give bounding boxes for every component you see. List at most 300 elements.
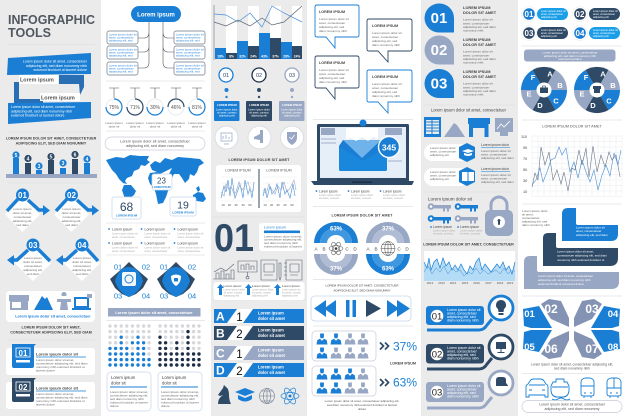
callout 01 (426, 296, 513, 330)
step 02: Lorem ipsum (63, 207, 81, 211)
callout 02: Lorem ipsum dolor sit (447, 346, 480, 350)
arrows caption: sed diam nonummy nibh (554, 366, 590, 370)
step 01: adipiscing elit, (13, 219, 32, 223)
keys and padlock: Lorem ipsum dolor (433, 228, 455, 232)
step 02: consectetuer (63, 215, 80, 219)
step 01 column: sit amet, consect (217, 110, 237, 114)
speech bubble 4: adipiscing elit, sed (372, 90, 398, 94)
step 03: dolor sit amet, (23, 260, 43, 264)
icon pill 1 (424, 143, 514, 162)
bullet list: Lorem ipsum (112, 228, 132, 232)
callout 03: 03 (432, 388, 442, 398)
donut left: 37% (330, 266, 343, 272)
strip C: Lorem ipsum (258, 348, 284, 352)
card 01 (6, 344, 95, 375)
grey caption pill: adipiscing elit, sed diam nonummy nibh (544, 54, 597, 58)
org chart: amet, consectetuer (176, 50, 201, 54)
teardrop 01: DOLOR SIT AMET (463, 10, 497, 15)
column and line chart (214, 5, 302, 60)
transport icons (526, 378, 621, 400)
text card right: Lorem ipsum dolor sit amet, (161, 390, 199, 394)
step 03 column: Lorem ipsum dolor (281, 108, 303, 112)
block arrows: 03 (585, 302, 599, 316)
panel: arrows: Lorem ipsum (282, 284, 300, 288)
numbered chips: adipiscing elit (541, 15, 557, 19)
icon pill 1: amet, consectetuer (481, 152, 507, 156)
cross diagram right: 03 (160, 292, 168, 300)
media heading: ADIPISCING ELIT, SED DIAM NONUMMY (333, 288, 391, 292)
panel: lorem ipsum text: euismod tincidunt ut laoreet (264, 244, 302, 248)
section heading: LOREM IPSUM DOLOR SIT AMET (228, 158, 290, 162)
speech bubble 3: adipiscing elit, sed (319, 76, 345, 80)
outlined caption pill: Lorem ipsum dolor sit amet, consectetuer (120, 140, 191, 144)
cross diagram left: 02 (142, 262, 150, 272)
panel: twin line charts: 40 (283, 203, 287, 207)
org chart: Lorem ipsum dolor sit (176, 32, 204, 36)
numbered chips: adipiscing elit (593, 15, 609, 19)
bar chart: 3 (62, 161, 65, 167)
text card right: dolore (161, 404, 170, 408)
text card left: dolor sit (111, 380, 126, 386)
strip A: A (216, 310, 225, 324)
grey caption pill: euismod tincidunt (558, 57, 582, 61)
panel: twin line charts: 20 (270, 203, 273, 207)
numbered chips: amet, consectetuer (593, 31, 615, 35)
bullet list: Lorem ipsum (178, 242, 198, 246)
text block: CONSECTETUER ADIPISCING ELIT, SED DIAM (10, 330, 92, 334)
numbered chips: Lorem ipsum dolor sit (541, 28, 566, 32)
teardrop 03: DOLOR SIT AMET (463, 74, 497, 79)
step 03: adipiscing elit, (23, 268, 43, 272)
step 03: 03 (29, 241, 38, 250)
org chart: adipiscing elit, sed (109, 54, 133, 58)
percentage rings: dolor sit (192, 124, 202, 128)
laptop caption list (316, 190, 405, 200)
footer text: dolore (358, 407, 366, 411)
block arrows (523, 299, 620, 359)
card 01: consectetuer adipiscing elit, sed diam (36, 362, 88, 366)
column and line chart: 24% (250, 54, 257, 58)
step 01: dolor sit amet, (13, 211, 32, 215)
segmented wheel right: D (590, 101, 596, 110)
percentage rings: 81% (192, 105, 203, 111)
speech bubble 1: diam nonummy nibh (319, 29, 347, 33)
numbered chips: 03 (525, 29, 534, 38)
block arrows: 01 (524, 309, 535, 320)
strip B: 2 (236, 329, 243, 341)
cross diagram right (157, 262, 196, 300)
donut right: B (374, 246, 378, 252)
strip B: Lorem ipsum (258, 328, 284, 332)
line chart (521, 124, 622, 196)
panel: business icons: Lorem ipsum dolor sit amet, consectetuer (15, 314, 91, 318)
block arrows: 04 (608, 309, 619, 320)
numbered chips (522, 6, 620, 40)
panel: lorem ipsum text: sed diam nonummy nibh (264, 241, 298, 245)
strip B (214, 326, 304, 341)
step 03 column: sit amet, consect (282, 110, 302, 114)
panel: twin line charts: 20 (228, 203, 231, 207)
speech bubble 4: LOREM IPSUM (372, 75, 398, 79)
text block (10, 326, 92, 334)
numbered chips: 04 (576, 29, 585, 38)
panel: arrows: adipiscing elit (252, 294, 268, 298)
cross diagram left (110, 262, 150, 300)
laptop caption list: Lorem ipsum (351, 190, 370, 194)
laptop caption list: sit amet, consect (383, 196, 403, 200)
card 02: laoreet dolore (36, 402, 55, 406)
stat 37%: 37% (393, 340, 417, 354)
bullet list: Lorem ipsum (144, 242, 165, 246)
teardrop 01: nonummy nibh (463, 28, 484, 32)
caption: LOREM IPSUM (390, 362, 416, 366)
ribbon callouts: Lorem ipsum (20, 78, 54, 84)
text card left: Lorem ipsum dolor sit amet, (110, 390, 148, 394)
org chart: adipiscing elit, sed (109, 38, 133, 42)
bullet list (108, 228, 203, 253)
bullet list: amet, consectetuer (178, 249, 200, 253)
segmented wheel left: E (526, 90, 532, 98)
bar chart heading (6, 136, 97, 146)
text card right: euismod tincidunt ut laoreet (161, 400, 199, 404)
speech bubble 1: LOREM IPSUM (319, 10, 345, 14)
teardrop 02: nonummy nibh (463, 60, 484, 64)
step 01: 01 (18, 191, 27, 200)
card 02: 02 (19, 383, 28, 392)
arrows caption: Lorem ipsum dolor sit amet, consectetuer adipiscing elit, (531, 362, 613, 366)
icon pill 2 (424, 167, 514, 186)
bullet list: amet, consectetuer (112, 235, 135, 239)
teardrop 01: adipiscing elit, sed diam (463, 25, 496, 29)
text card right: sed diam nonummy nibh (161, 397, 195, 401)
folded ribbons: sit amet, (522, 212, 534, 216)
text card left: Lorem ipsum (111, 375, 136, 380)
speech bubble 1: amet, consectetuer (319, 21, 345, 25)
people panel 37 (312, 331, 376, 361)
step 02 column (246, 68, 272, 121)
card 02 (6, 378, 95, 409)
step 03: Lorem ipsum (24, 256, 42, 260)
text card right: Lorem ipsum (162, 375, 187, 380)
callout 02: 02 (432, 350, 442, 360)
dot matrix left (108, 324, 151, 367)
bar chart: 5 (15, 153, 18, 159)
icon pill 2: adipiscing elit, sed diam (481, 180, 514, 184)
segmented wheel right: C (606, 96, 612, 106)
step 03 column: LOREM IPSUM (282, 103, 302, 107)
bullet list: Lorem ipsum dolor sit (112, 246, 138, 250)
title: TOOLS (8, 25, 51, 40)
speech bubble 3: diam nonummy nibh (319, 80, 347, 84)
outlined footer pill: adipiscing elit, sed diam nonummy (545, 407, 600, 411)
segmented wheel right: F (584, 73, 589, 82)
text block: LOREM IPSUM DOLOR SIT AMET, (21, 326, 81, 330)
segmented wheel left: D (537, 101, 543, 110)
laptop with mail (311, 120, 414, 185)
panel: lorem ipsum text: Lorem ipsum dolor sit amet, (264, 234, 302, 238)
icon row (424, 117, 513, 137)
outlined footer pill (522, 400, 622, 412)
teardrop 03: Lorem ipsum dolor sit (463, 82, 493, 86)
percentage rings: Lorem ipsum (126, 121, 144, 125)
strip D: D (216, 364, 225, 378)
percentage rings: 75% (109, 105, 120, 111)
donut left: A (314, 246, 318, 252)
speech bubble 1: Lorem ipsum dolor sit (319, 17, 349, 21)
line chart: 110 (521, 135, 527, 139)
folded ribbons: adipiscing elit, sed (522, 220, 548, 224)
column and line chart: 37% (272, 54, 279, 58)
strip C (214, 346, 304, 361)
keys and padlock: sit amet, consect (460, 232, 480, 236)
strip A (214, 309, 304, 324)
step 02 column: LOREM IPSUM (249, 103, 270, 107)
bullet list: Lorem ipsum (112, 242, 132, 246)
outline icons row (213, 260, 302, 280)
panel: twin line charts: LOREM IPSUM (225, 168, 251, 172)
ribbon callouts: adipiscing elit, sed diam nonummy nibh (11, 109, 72, 113)
speech bubble 3: Lorem ipsum dolor sit (319, 68, 349, 72)
step 01: sed diam (16, 223, 29, 227)
percentage rings: dolor sit (171, 124, 181, 128)
panel: arrows: sit amet, consec (282, 290, 301, 294)
area chart: 2013 (438, 281, 445, 285)
donut left: 63% (330, 226, 343, 232)
panel: twin line charts (216, 165, 301, 212)
step 04: dolor sit amet, (72, 260, 92, 264)
outlined footer pill: Lorem ipsum dolor sit amet, consectetuer (539, 402, 606, 406)
strip A: dolor sit amet (258, 316, 285, 321)
icon row heading: Lorem ipsum dolor sit amet, consectetuer (431, 108, 507, 112)
numbered chips: Lorem ipsum dolor sit (541, 9, 566, 13)
folded ribbons: Lorem ipsum dolor sit amet, (557, 250, 594, 254)
folded ribbons: Lorem ipsum dolor sit amet, consectetuer (538, 274, 593, 278)
segmented wheel left: A (547, 70, 553, 78)
org chart: Lorem ipsum dolor sit (109, 64, 137, 68)
teardrop 03: 03 (431, 76, 447, 92)
step 02: 02 (67, 191, 76, 200)
donut right: 37% (382, 226, 395, 232)
folded ribbons: consectetuer (522, 216, 540, 220)
percentage rings: dolor sit (109, 124, 119, 128)
arrows caption (531, 362, 613, 370)
panel: twin line charts: 10 (221, 203, 225, 207)
panel: lorem ipsum text (259, 223, 304, 251)
step 01: consectetuer (14, 215, 31, 219)
column and line chart: 24% (294, 54, 300, 58)
column and line chart: 43% (261, 54, 268, 58)
strip D: Lorem ipsum (258, 364, 284, 370)
numbered chips: Lorem ipsum dolor sit (593, 9, 618, 13)
cross diagram right: 04 (188, 292, 196, 300)
panel: arrows: Lorem ipsum dolor (252, 288, 274, 292)
callout 03: diam nonummy nibh (447, 394, 479, 398)
speech bubble 4: amet, consectetuer (372, 86, 398, 90)
laptop caption list: Lorem ipsum dolor (383, 193, 405, 197)
speech bubble 3 (315, 56, 359, 99)
folded ribbons: nonummy nibh euismod tincidunt ut (557, 258, 604, 262)
segmented wheel right (574, 67, 620, 113)
teardrop 02: DOLOR SIT AMET (463, 42, 497, 47)
step 03 column: adipiscing elit (284, 114, 300, 118)
icon pill 1: amet, consectetuer (430, 150, 456, 154)
step 01 (5, 188, 50, 232)
ribbon callouts: Lorem ipsum (41, 96, 75, 102)
card 01: Lorem ipsum dolor sit amet, (36, 358, 74, 362)
step 04: consectetuer (73, 264, 91, 268)
panel: lorem ipsum text: consectetuer adipiscing elit, (264, 238, 302, 242)
bar chart: 3 (38, 164, 41, 170)
donut left: B (322, 246, 326, 252)
org chart: amet, consectetuer (109, 36, 134, 40)
media heading: LOREM IPSUM DOLOR SIT AMET, CONSECTETUER (325, 284, 399, 288)
step 02 (54, 188, 99, 232)
org chart: amet, consectetuer (109, 50, 134, 54)
step 03: sed diam (27, 272, 40, 276)
bottom icons (218, 385, 299, 406)
percentage rings (105, 88, 206, 128)
donut left: C (345, 246, 349, 252)
speech bubble 4: diam nonummy nibh (372, 94, 400, 98)
column and line chart: 28% (283, 54, 290, 58)
area chart: 2012 (427, 281, 434, 285)
strip A: 1 (236, 312, 243, 324)
keys and padlock: Lorem ipsum (433, 225, 452, 229)
callout 01: Lorem ipsum dolor sit (447, 308, 480, 312)
org chart: Lorem ipsum dolor sit (109, 48, 137, 52)
laptop caption list: Lorem ipsum (319, 190, 338, 194)
line chart: 10 (523, 190, 527, 194)
grey caption pill: Lorem ipsum dolor sit amet, consectetuer (542, 50, 598, 54)
panel: lorem ipsum text: Lorem ipsum (264, 226, 286, 230)
donut right (366, 222, 410, 275)
column and line chart: 32% (239, 54, 246, 58)
strip A: Lorem ipsum (258, 310, 284, 316)
bar chart: 6 (74, 152, 77, 158)
panel: twin line charts: 30 (276, 203, 280, 207)
card 02: Lorem ipsum dolor sit amet, (36, 392, 74, 396)
strip D: 2 (236, 366, 243, 378)
panel: business icons (6, 291, 95, 322)
percentage rings: dolor sit (150, 124, 160, 128)
text card left: consectetuer adipiscing elit, (110, 394, 148, 398)
big number: 01 (214, 217, 254, 260)
icon pill 2: Lorem ipsum dolor (430, 170, 456, 174)
block arrows: 07 (585, 342, 599, 356)
bullet list: Lorem ipsum dolor sit (178, 232, 203, 236)
bar chart (6, 151, 97, 178)
ribbon callouts (7, 53, 91, 124)
callout 02: adipiscing elit, sed (447, 353, 476, 357)
panel: twin line charts: 10 (263, 203, 267, 207)
speech bubble 2: Lorem ipsum dolor sit (372, 31, 402, 35)
teardrop 03: nonummy nibh (463, 92, 484, 96)
laptop caption list: Lorem ipsum dolor (319, 193, 341, 197)
numbered chips: 02 (576, 10, 585, 19)
panel: twin line charts: 50 (248, 203, 252, 207)
line chart: LOREM IPSUM DOLOR SIT AMET (542, 124, 602, 128)
donut left: D (353, 246, 357, 252)
text card right: consectetuer adipiscing elit, (161, 394, 199, 398)
line chart: 70 (523, 157, 527, 161)
panel: arrows (213, 282, 305, 300)
strip B: dolor sit amet (258, 333, 285, 338)
speech bubble 1 (315, 5, 359, 48)
numbered chips: adipiscing elit (593, 34, 609, 38)
line chart: 30 (523, 179, 527, 183)
org chart: Lorem ipsum dolor sit (109, 32, 137, 36)
panel: arrows: Lorem ipsum (224, 284, 242, 288)
icon pill 2: Lorem ipsum dolor sit (481, 173, 511, 177)
area chart: 2019 (507, 281, 514, 285)
step 02: adipiscing elit, (62, 219, 81, 223)
percentage rings: dolor sit (130, 124, 140, 128)
teardrop 02 (424, 35, 497, 64)
panel: arrows: Lorem ipsum dolor (224, 288, 245, 292)
callout 02: diam nonummy nibh (447, 356, 479, 360)
step 03: consectetuer (24, 264, 42, 268)
folded ribbons: diam nonummy nibh (522, 223, 550, 227)
teardrop 03: LOREM IPSUM (463, 69, 490, 74)
keys and padlock (428, 196, 513, 236)
laptop caption list: Lorem ipsum (383, 190, 402, 194)
title (8, 12, 96, 40)
bullet list: amet, consectetuer (178, 235, 200, 239)
percentage rings: Lorem ipsum (188, 121, 206, 125)
step 01 column (214, 68, 240, 121)
callout 03: amet, consectetuer (447, 388, 478, 392)
step 04: Lorem ipsum (73, 256, 91, 260)
cross diagram right: 01 (160, 262, 168, 272)
line chart: 90 (523, 146, 527, 150)
numbered chips: amet, consectetuer (541, 12, 563, 16)
org chart: amet, consectetuer (109, 66, 134, 70)
speech bubble 2: adipiscing elit, sed (372, 39, 398, 43)
panel: arrows: sit amet, consec (252, 290, 271, 294)
grey caption pill (524, 50, 616, 62)
numbered chips: amet, consectetuer (541, 31, 563, 35)
panel: twin line charts: 30 (234, 203, 238, 207)
step 03 column: 03 (289, 73, 295, 79)
speech bubble 2: diam nonummy nibh (372, 43, 400, 47)
callout 03: Lorem ipsum dolor sit (447, 384, 480, 388)
text card left: euismod tincidunt ut laoreet (110, 400, 148, 404)
strip D (214, 363, 304, 378)
text card left: dolore (110, 404, 119, 408)
strip D: dolor sit amet (258, 370, 285, 375)
donut right: 63% (382, 266, 395, 272)
stat 63% (380, 376, 417, 390)
area chart: LOREM IPSUM DOLOR SIT AMET, CONSECTETUER (423, 242, 514, 246)
text card right (158, 372, 202, 411)
laptop caption list: sit amet, consect (319, 196, 339, 200)
teardrop 01: 01 (431, 10, 447, 27)
step 02 column: Lorem ipsum dolor (248, 108, 270, 112)
bullet list: amet, consectetuer (144, 235, 167, 239)
teardrop 03: adipiscing elit, sed diam (463, 89, 496, 93)
teardrop 01 (424, 3, 497, 33)
bullet list: Lorem ipsum dolor sit (144, 246, 170, 250)
speech bubble 2: amet, consectetuer (372, 35, 398, 39)
laptop caption list: sit amet, consect (351, 196, 371, 200)
panel: arrows: sit amet, consec (224, 290, 243, 294)
area chart: 2018 (497, 281, 504, 285)
callout 01: adipiscing elit, sed (447, 315, 476, 319)
panel: twin line charts: 40 (241, 203, 245, 207)
bullet list: amet, consectetuer (144, 249, 167, 253)
numbered chips: Lorem ipsum dolor sit (593, 28, 618, 32)
world map: 23 (157, 176, 166, 186)
